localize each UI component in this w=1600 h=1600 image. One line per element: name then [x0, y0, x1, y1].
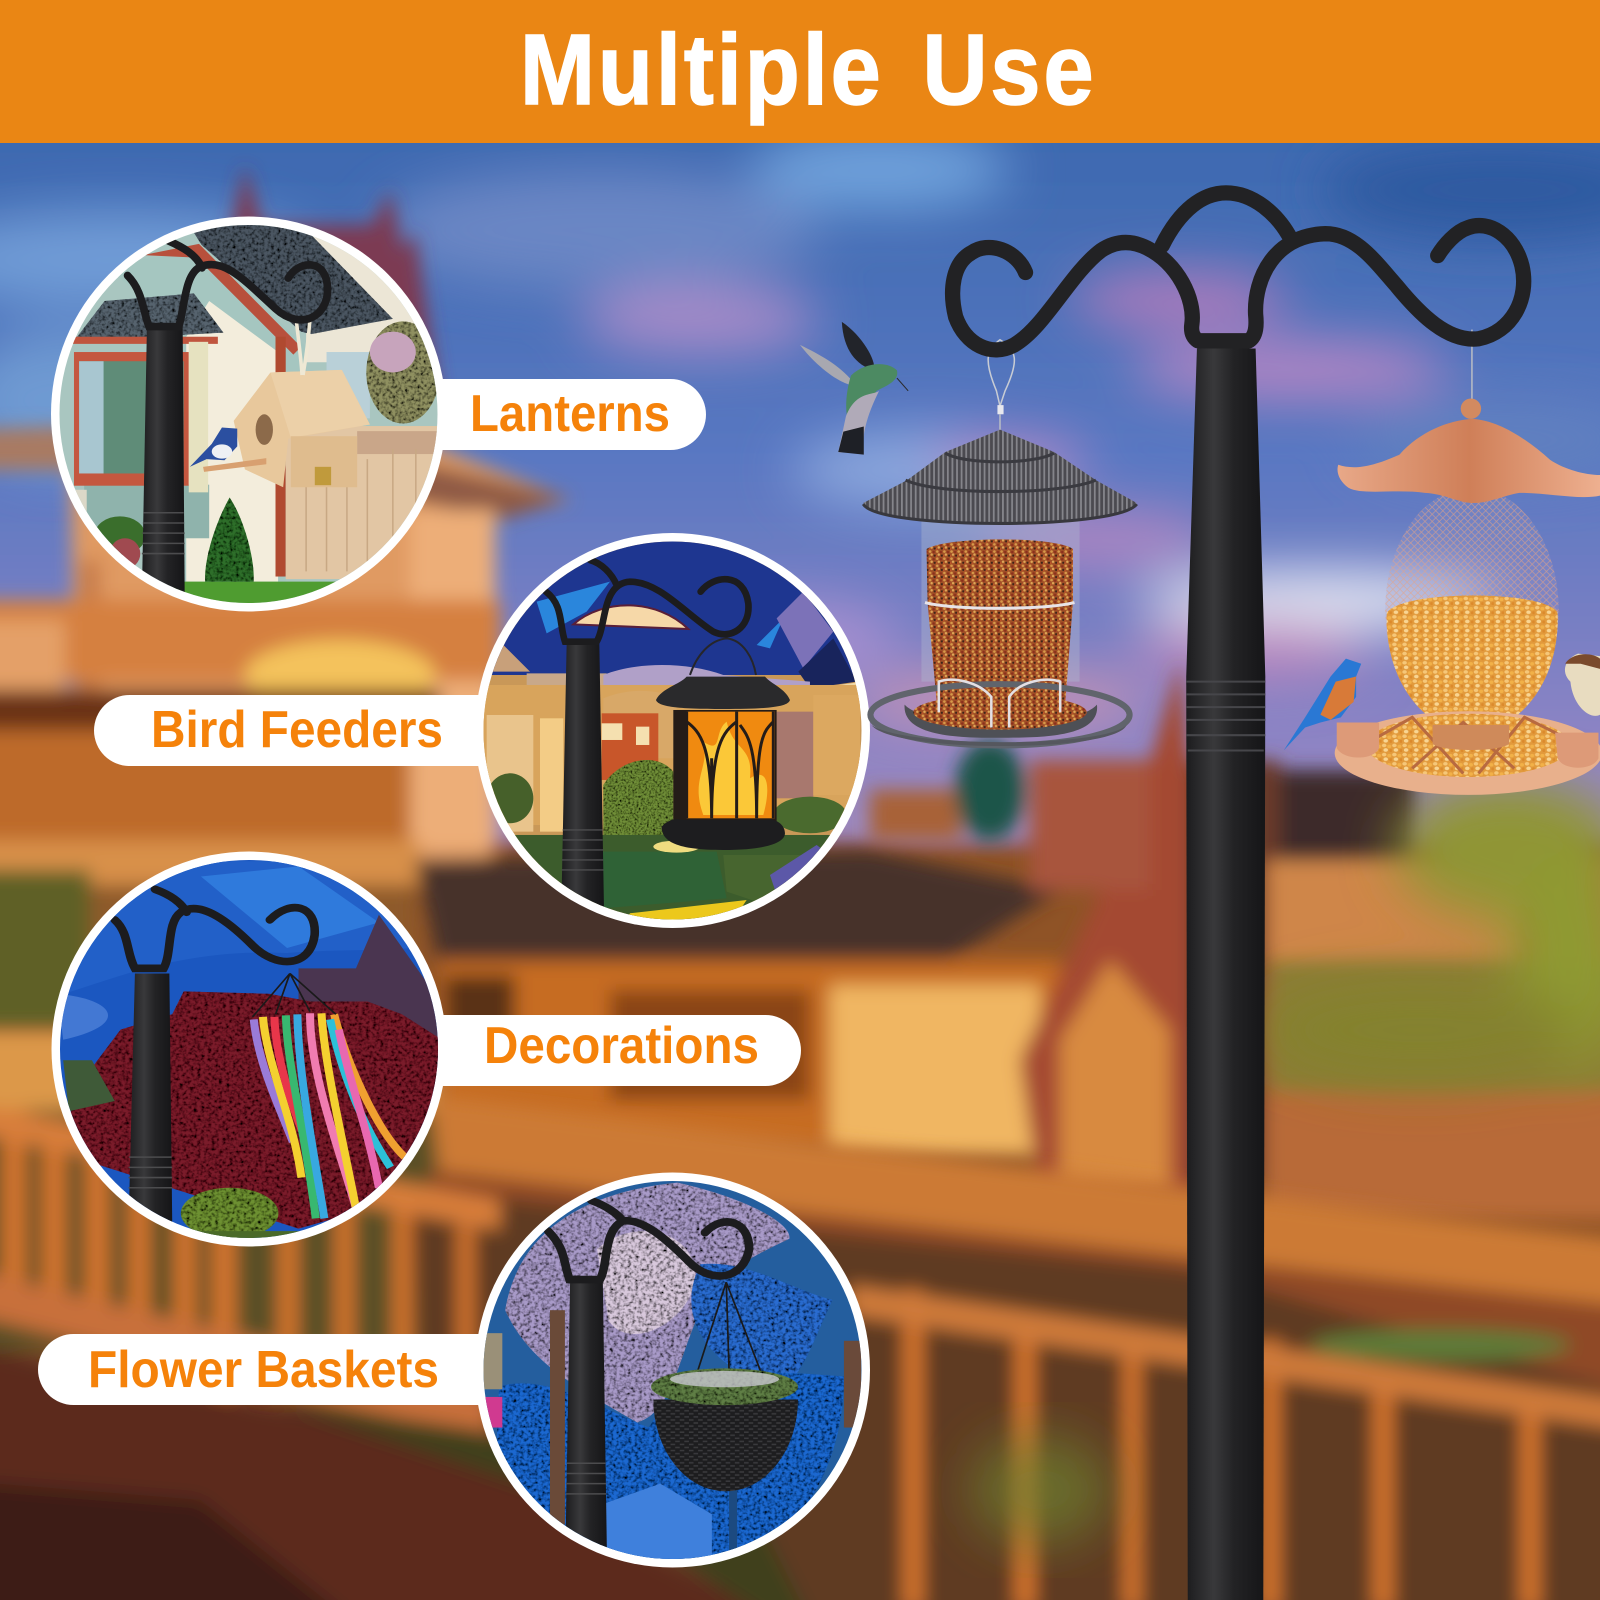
blurred red tower at right — [1020, 660, 1190, 1200]
circle photo: birdhouse on shepherd hook — [46, 214, 449, 617]
label: Decorations — [400, 1015, 801, 1086]
mini pole — [565, 1282, 607, 1547]
blurred palm — [1260, 780, 1600, 1080]
blurred left railing and lower terrace — [0, 1030, 440, 1110]
mini pole — [142, 327, 185, 597]
left bird feeder — [863, 340, 1137, 746]
blurred house at left — [225, 165, 440, 400]
label: Decorations: Decorations — [484, 1017, 759, 1075]
flowering tree — [366, 321, 440, 423]
wind sock ribbons — [254, 1013, 405, 1218]
title: Multiple Use — [520, 15, 1096, 126]
small bird — [190, 428, 237, 467]
mini pole — [129, 973, 172, 1223]
label: Flower Baskets: Flower Baskets — [88, 1341, 439, 1399]
clouds — [0, 130, 1600, 728]
title band — [0, 0, 1600, 143]
circle photo: lantern at house entrance — [470, 525, 880, 942]
icon: bluebird — [1284, 659, 1361, 751]
fence — [286, 426, 444, 579]
icon: sparrow — [1565, 654, 1600, 716]
label: Flower Baskets — [38, 1334, 518, 1405]
right copper bird feeder — [1335, 330, 1600, 795]
label: Bird Feeders: Bird Feeders — [151, 701, 443, 759]
label: Lanterns — [400, 379, 706, 450]
label: Lanterns: Lanterns — [470, 385, 670, 443]
sky base — [0, 143, 1600, 858]
hook arms — [953, 193, 1524, 350]
main pole — [1186, 348, 1265, 1600]
gold latch — [315, 467, 331, 485]
icon: hummingbird — [800, 322, 908, 455]
main shepherd hook pole and feeders — [800, 193, 1600, 1600]
label: Bird Feeders — [94, 695, 514, 766]
blurred plant at bottom — [970, 1435, 1110, 1545]
mini pole — [561, 643, 604, 908]
grass and shrubs — [174, 582, 336, 603]
shrubs — [603, 760, 674, 835]
basket — [653, 1399, 798, 1491]
blurred central roof and wall — [415, 850, 1060, 985]
birdhouse — [234, 370, 370, 487]
lantern — [673, 710, 777, 822]
circle photo: hanging flower basket — [475, 1172, 873, 1570]
chains — [698, 1282, 761, 1371]
circle photo: rainbow wind sock — [52, 851, 454, 1249]
